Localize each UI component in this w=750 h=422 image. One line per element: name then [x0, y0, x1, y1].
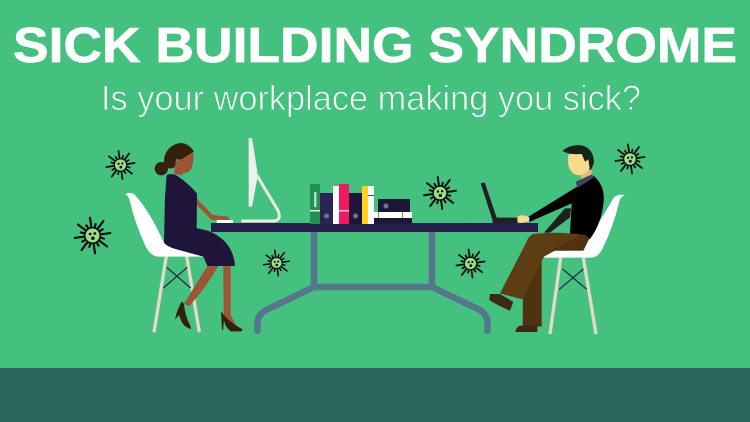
virus under table left	[262, 248, 291, 278]
hand	[517, 215, 529, 223]
front shoe	[221, 311, 243, 331]
woman at desktop computer	[125, 138, 279, 332]
hair	[562, 145, 594, 171]
arm	[196, 198, 229, 220]
dress	[164, 174, 235, 266]
back shoe	[515, 326, 537, 332]
face	[568, 150, 590, 175]
virus under table right	[454, 247, 487, 280]
subtitle: Is your workplace making you sick?	[101, 79, 641, 118]
virus top right	[613, 142, 647, 176]
hair bun	[155, 162, 168, 175]
title: SICK BUILDING SYNDROME	[13, 19, 737, 73]
keyboard	[217, 220, 233, 223]
table end	[470, 223, 538, 232]
back leg	[184, 265, 218, 306]
back leg	[523, 257, 542, 327]
hair	[164, 143, 194, 169]
virus centre	[422, 175, 458, 211]
virus top left	[104, 149, 137, 181]
table legs	[258, 228, 488, 331]
laptop	[481, 182, 517, 223]
front shoe	[489, 294, 513, 311]
far arm	[544, 208, 571, 233]
thigh shading	[550, 235, 589, 251]
front leg	[223, 265, 237, 327]
torso and arm	[527, 176, 604, 239]
back shoe	[175, 301, 191, 329]
thigh and front leg	[500, 233, 589, 299]
chair	[125, 193, 205, 332]
neck and face	[174, 152, 193, 175]
collar	[576, 174, 594, 188]
man at laptop	[470, 145, 625, 334]
chair	[544, 195, 625, 334]
monitor	[241, 138, 279, 221]
table top	[211, 223, 538, 232]
table	[211, 223, 538, 331]
books and binders	[310, 184, 412, 224]
footer band	[0, 368, 750, 422]
neck	[580, 170, 592, 182]
virus left	[72, 215, 113, 256]
